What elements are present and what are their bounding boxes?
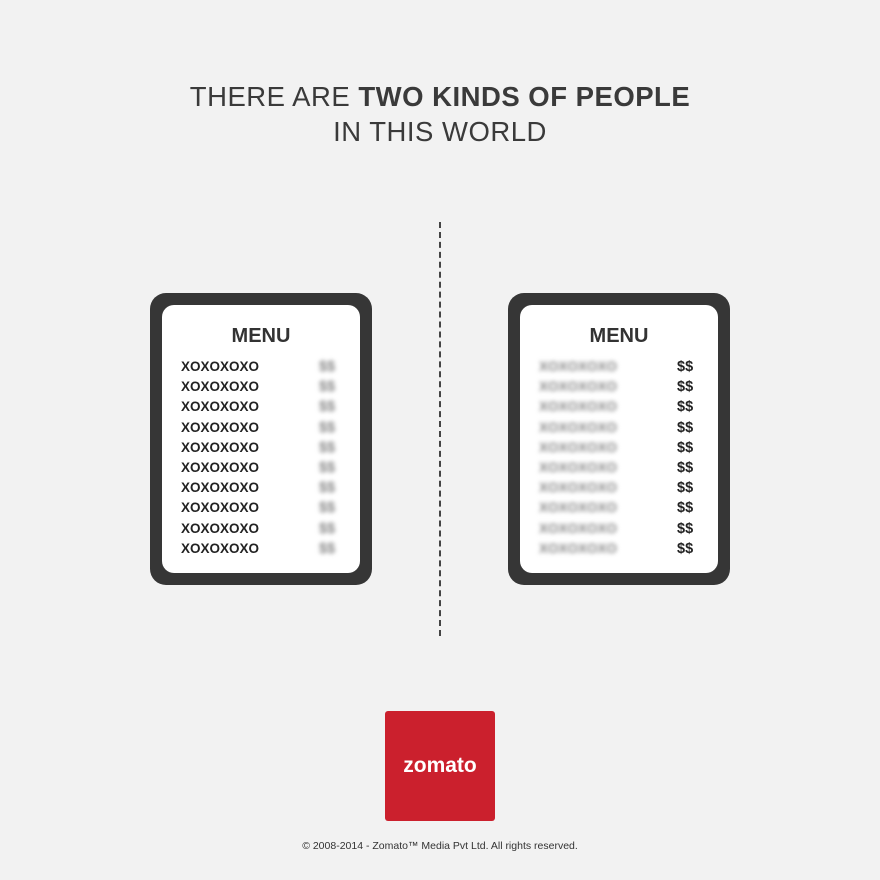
panel: left menu: $$ (319, 379, 335, 395)
panel: right menu: XOXOXOXO (539, 460, 617, 475)
panel: left menu: $$ (319, 541, 335, 557)
panel: left menu: XOXOXOXO (181, 541, 259, 556)
panel: right menu: XOXOXOXO (539, 480, 617, 495)
panel: right menu: XOXOXOXO (539, 379, 617, 394)
divider dashed line (439, 222, 441, 636)
panel: left menu: XOXOXOXO (181, 480, 259, 495)
panel: right menu: XOXOXOXO (539, 500, 617, 515)
panel: left menu: XOXOXOXO (181, 520, 259, 536)
panel: left menu: $$ (319, 440, 335, 456)
panel: left menu: XOXOXOXO (181, 359, 259, 374)
panel: right menu: $$ (677, 460, 693, 476)
panel: left menu: XOXOXOXO (181, 379, 259, 394)
panel: left menu: MENU (232, 325, 290, 347)
title: IN THIS WORLD (333, 116, 547, 147)
panel: right menu: XOXOXOXO (539, 399, 617, 414)
panel: right menu: $$ (677, 359, 693, 375)
panel: left menu: XOXOXOXO (181, 440, 259, 455)
panel: left menu: XOXOXOXO (181, 420, 259, 435)
panel: left menu: $$ (319, 520, 335, 536)
panel: right menu: $$ (677, 440, 693, 456)
panel: right menu: XOXOXOXO (539, 520, 617, 536)
panel: left menu: XOXOXOXO (181, 500, 259, 515)
title: THERE ARE TWO KINDS OF PEOPLE (190, 81, 690, 112)
footer copyright: © 2008-2014 - Zomato™ Media Pvt Ltd. All rights reserved. (302, 840, 578, 852)
logo: zomato: zomato (403, 754, 477, 777)
title (190, 81, 690, 147)
panel: left menu: $$ (319, 460, 335, 476)
panel: right menu: $$ (677, 399, 693, 415)
panel: left menu: $$ (319, 420, 335, 436)
panel: left menu: XOXOXOXO (181, 399, 259, 414)
panel: right menu: $$ (677, 500, 693, 516)
panel: right menu (508, 293, 730, 585)
panel: right menu: XOXOXOXO (539, 359, 617, 374)
panel: right menu: $$ (677, 379, 693, 395)
panel: right menu: XOXOXOXO (539, 541, 617, 556)
panel: right menu: $$ (677, 480, 693, 496)
panel: left menu: $$ (319, 399, 335, 415)
panel: right menu: MENU (590, 325, 648, 347)
panel: left menu (150, 293, 372, 585)
panel: right menu: XOXOXOXO (539, 440, 617, 455)
panel: right menu: $$ (677, 541, 693, 557)
panel: left menu: $$ (319, 359, 335, 375)
panel: left menu: XOXOXOXO (181, 460, 259, 475)
panel: left menu: $$ (319, 480, 335, 496)
logo: zomato (385, 711, 495, 821)
panel: right menu: $$ (677, 420, 693, 436)
panel: left menu: $$ (319, 500, 335, 516)
panel: right menu: XOXOXOXO (539, 420, 617, 435)
panel: right menu: $$ (677, 520, 693, 536)
